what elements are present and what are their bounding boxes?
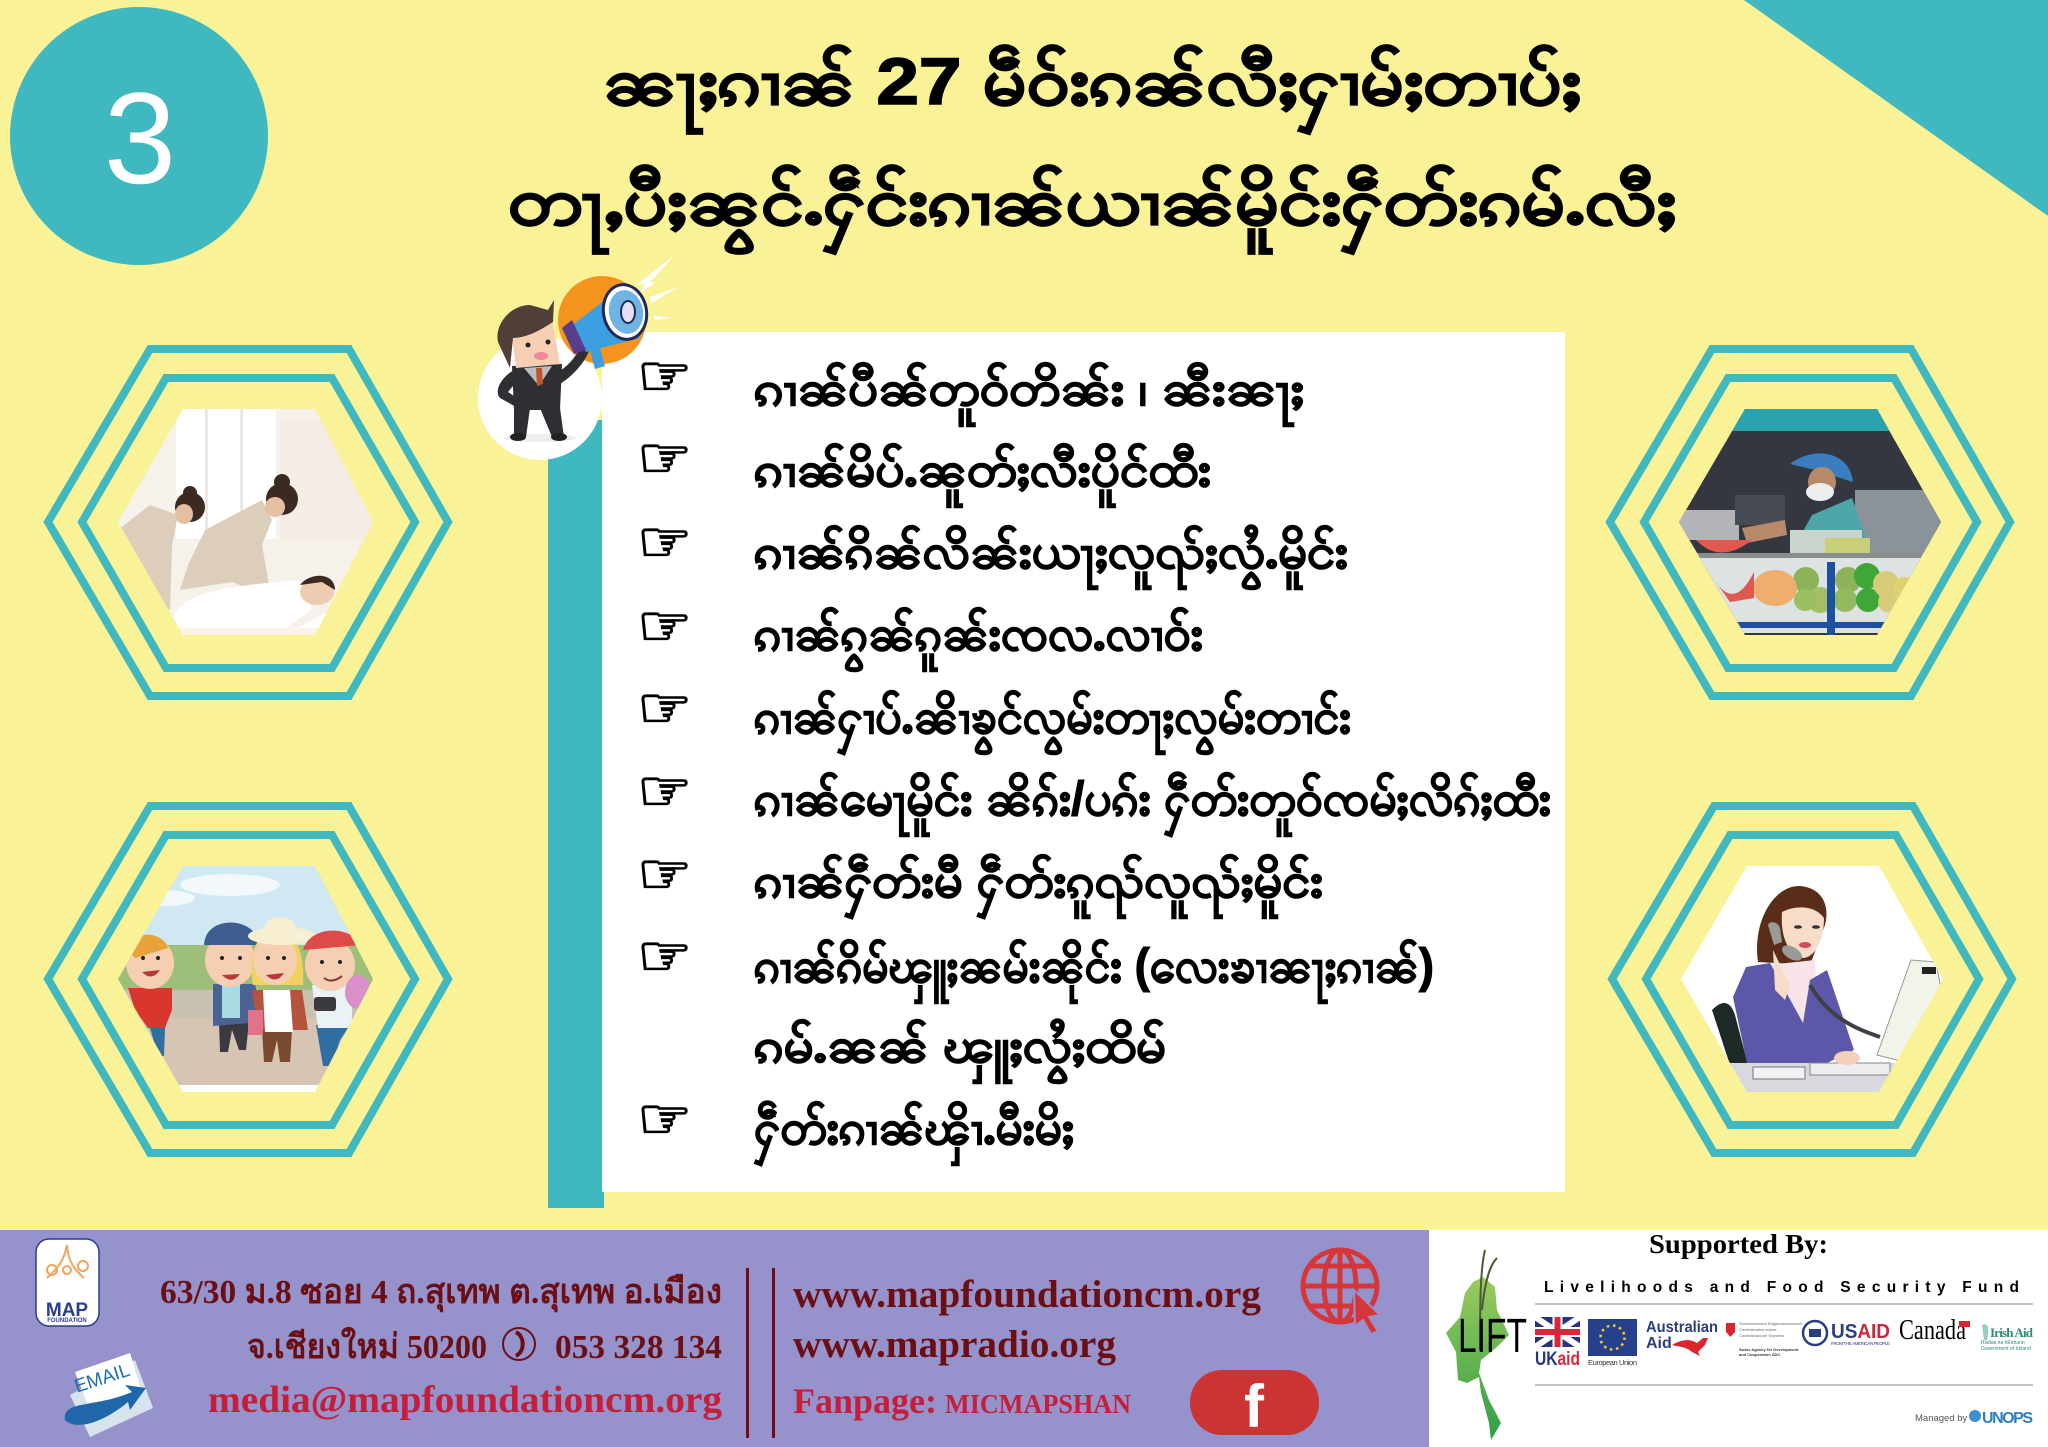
fanpage xyxy=(793,1381,1131,1421)
website links: www.mapfoundationcm.org xyxy=(793,1273,1261,1316)
logo: managed by UNOPS: Managed by xyxy=(1915,1413,1968,1424)
list item 7 xyxy=(637,842,1323,921)
heading: supported by: Supported By: xyxy=(1649,1229,1828,1259)
list item 3 xyxy=(637,510,1348,591)
logo: European Union xyxy=(1588,1319,1637,1367)
list item 5: ☞ xyxy=(637,676,692,741)
list item 4: ☞ xyxy=(637,594,692,659)
list item 5: ၵၢၼ်ႁၢပ်ႉၼိၢၶွင်လွမ်းတႃႈလွမ်းတၢင်း xyxy=(754,688,1351,757)
logo: Australian Aid: Aid xyxy=(1646,1335,1672,1352)
logo: USAID: FROM THE AMERICAN PEOPLE xyxy=(1831,1341,1890,1346)
fanpage: Fanpage: xyxy=(793,1381,937,1421)
logo: Canada: Canada xyxy=(1899,1315,1966,1346)
divider xyxy=(746,1268,749,1438)
list item 3: ၵၢၼ်ၵိၼ်လိၼ်းယႃႈလူၺ်ႈလွႆႉမိူင်း xyxy=(754,523,1348,591)
logo: LIFT map xyxy=(1446,1250,1527,1440)
panel: job list xyxy=(602,332,1565,1192)
divider xyxy=(1535,1384,2033,1386)
list item 6 xyxy=(637,759,1551,839)
logo: Swiss agency: and Cooperation SDC xyxy=(1739,1352,1780,1357)
list item 2 xyxy=(637,426,1211,509)
list item 4: ၵၢၼ်ၵွၼ်ၵူၼ်းၸလႉလၢဝ်း xyxy=(754,605,1203,673)
list item 6: ၵၢၼ်မေႃမိူင်း ၼိၵ်း/ပၵ်း ႁဵတ်းတူဝ်ၸမ်ႈလိၵ်ႈထီး xyxy=(754,770,1551,839)
address text: 053 328 134 xyxy=(555,1329,722,1366)
list item 7: ☞ xyxy=(637,842,692,907)
title: ၼႃႈၵၢၼ် 27 မဵဝ်းၵၼ်လီႈႁၢမ်ႈတၢပ်ႈ xyxy=(603,43,1581,135)
logo: Irish Aid: Government of Ireland xyxy=(1981,1346,2031,1352)
panel: teal side bar xyxy=(548,420,604,1208)
logo: MAP foundation xyxy=(36,1239,99,1326)
logo: USAID xyxy=(1803,1321,1890,1346)
panel: footer contact xyxy=(0,1230,1429,1447)
list item 1: ၵၢၼ်ပီၼ်တူဝ်တိၼ်း ၊ ၼီးၼႃႈ xyxy=(754,360,1304,428)
address text: 63/30 ม.8 ซอย 4 ถ.สุเทพ ต.สุเทพ อ.เมือง xyxy=(160,1273,722,1313)
list item 3: ☞ xyxy=(637,510,692,575)
number badge xyxy=(10,7,268,265)
list item 8: ၵမ်ႉၼၼ် ၾူႈလွႆႈထိမ် xyxy=(754,1017,1166,1085)
logo: managed by UNOPS: UNOPS xyxy=(1982,1410,2033,1427)
logo: European Union: European Union xyxy=(1588,1358,1637,1367)
list item 8: ☞ xyxy=(637,924,692,989)
logo: Swiss agency: Confederazione Svizzera xyxy=(1739,1333,1784,1338)
logo: UK aid: UKaid xyxy=(1535,1349,1580,1370)
logo: UK aid xyxy=(1535,1317,1580,1370)
logo: Swiss agency: Schweizerische Eidgenossenschaft xyxy=(1739,1321,1803,1326)
list item 1 xyxy=(637,344,1304,428)
icon: facebook: f xyxy=(1244,1373,1265,1440)
number badge: 3 xyxy=(104,65,176,211)
list item 9: ႁဵတ်းၵၢၼ်ၾိၢႉမီးမိႈ xyxy=(754,1099,1074,1168)
hexagon photo: tourists xyxy=(48,806,448,1153)
icon: globe xyxy=(1303,1250,1380,1334)
logo: Irish Aid: Irish Aid xyxy=(1990,1325,2034,1340)
hexagon photo: massage xyxy=(48,349,448,696)
logo: Irish Aid xyxy=(1981,1324,2034,1352)
panel: supporters xyxy=(1429,1229,2048,1447)
list item 5 xyxy=(637,676,1351,757)
logo: Swiss agency xyxy=(1726,1321,1803,1357)
hexagon photo: fruit seller xyxy=(1610,349,2010,696)
logo: MAP foundation: FOUNDATION xyxy=(47,1318,87,1324)
list item 8 xyxy=(637,924,1434,1085)
logo: Australian Aid xyxy=(1646,1319,1718,1356)
website links xyxy=(793,1273,1261,1366)
title xyxy=(508,43,1676,255)
website links: www.mapradio.org xyxy=(793,1323,1116,1366)
logo: USAID: USAID xyxy=(1831,1321,1890,1343)
list item 4 xyxy=(637,594,1203,673)
title: တႃႇပီႈၼွင်ႉႁဵင်းၵၢၼ်ယၢၼ်မိူင်းႁဵတ်းၵမ်ႉလီႈ xyxy=(508,163,1676,255)
logo: Irish Aid: Rialtas na hÉireann xyxy=(1981,1339,2025,1346)
logo: Australian Aid: Australian xyxy=(1646,1319,1718,1336)
hexagon photo: phone operator xyxy=(1612,806,2012,1153)
list item 9: ☞ xyxy=(637,1087,692,1152)
list item 7: ၵၢၼ်ႁဵတ်းမီ ႁဵတ်းၵူၺ်လူၺ်ႈမိူင်း xyxy=(754,852,1323,921)
email address: media@mapfoundationcm.org xyxy=(208,1379,722,1421)
list item 1: ☞ xyxy=(637,344,692,409)
illustration: man with megaphone xyxy=(478,255,680,460)
address text: จ.เชียงใหม่ 50200 xyxy=(247,1326,487,1366)
fanpage: MICMAPSHAN xyxy=(945,1389,1131,1419)
divider xyxy=(772,1268,775,1438)
address text xyxy=(160,1273,722,1366)
divider xyxy=(1535,1303,2033,1305)
list item 6: ☞ xyxy=(637,759,692,824)
logo: Swiss agency: Confédération suisse xyxy=(1739,1327,1777,1332)
icon: email: EMAIL xyxy=(72,1360,133,1398)
icon: telephone xyxy=(503,1328,535,1360)
icon: email xyxy=(65,1353,153,1437)
logo: LIFT map: LIFT xyxy=(1458,1310,1527,1363)
fund name: Livelihoods and Food Security Fund xyxy=(1544,1279,2019,1296)
list item 8: ၵၢၼ်ၵိမ်ၾူႈၼမ်းၼိုင်း (လေးၶၢၼႃႈၵၢၼ်) xyxy=(754,937,1434,1005)
logo: managed by UNOPS xyxy=(1915,1410,2033,1427)
corner triangle xyxy=(1744,0,2048,216)
list item 2: ☞ xyxy=(637,426,692,491)
logo: Swiss agency: Swiss Agency for Development xyxy=(1739,1347,1799,1352)
icon: facebook xyxy=(1190,1370,1319,1440)
logo: MAP foundation: MAP xyxy=(46,1300,88,1321)
list item 9 xyxy=(637,1087,1074,1168)
list item 2: ၵၢၼ်မိပ်ႉၼူတ်ႈလီးပိူင်ထီး xyxy=(754,441,1211,509)
